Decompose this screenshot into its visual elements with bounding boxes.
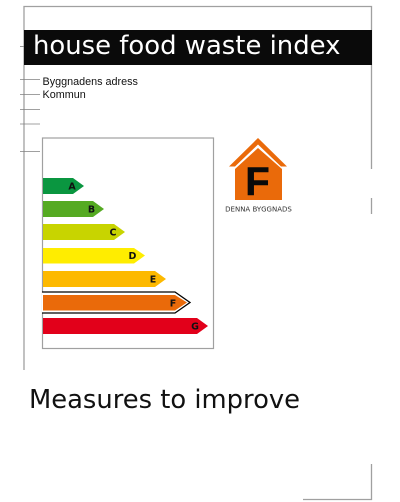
bar G: [43, 318, 208, 334]
address text: Kommun: [42, 89, 86, 101]
bar D: D: [129, 251, 137, 262]
title: house food waste index: [33, 31, 340, 61]
bar B: [43, 201, 104, 217]
address text: Byggnadens adress: [42, 76, 139, 88]
panel: energy rating chart: [42, 138, 214, 348]
form tick lines: [20, 46, 40, 152]
bar A: A: [68, 182, 76, 192]
bar F highlighted: [42, 292, 190, 313]
icon: house rating F: [229, 138, 287, 204]
bar D: [43, 248, 145, 264]
bar G: G: [191, 322, 199, 332]
bar A: [43, 178, 84, 194]
house caption: DENNA BYGGNADS: [225, 206, 292, 214]
bar F highlighted: F: [170, 298, 176, 310]
bar E: [43, 271, 166, 287]
bar C: C: [110, 228, 117, 238]
bar B: B: [88, 204, 95, 216]
bar C: [43, 224, 125, 240]
address text: [42, 76, 139, 101]
icon: house rating F: F: [245, 160, 270, 204]
bar E: E: [150, 274, 156, 286]
heading: measures to improve: Measures to improve: [29, 385, 300, 415]
